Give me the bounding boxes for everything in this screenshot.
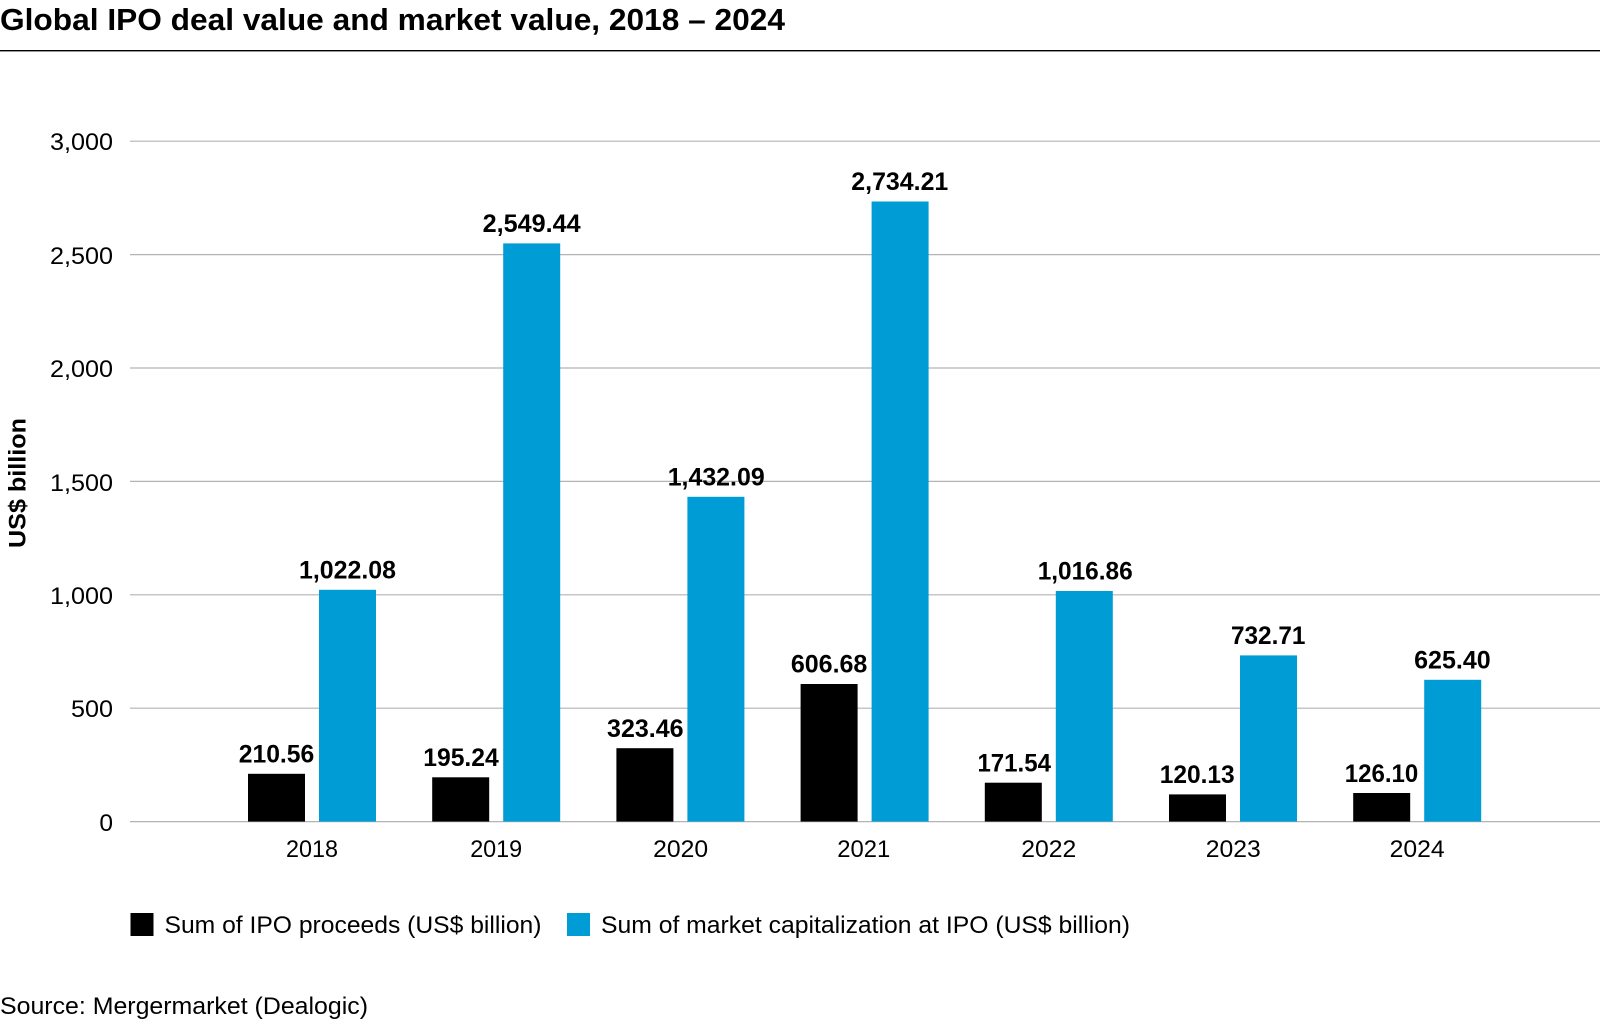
bars: 2022 [977,558,1133,863]
bars: 2018: 1,022.08 [299,556,396,584]
bars: 2020: 2020 [653,836,708,863]
y axis labels: 3,000 [50,129,113,156]
y axis labels: 1,000 [50,583,113,610]
y axis labels: 0 [99,810,113,837]
bars: 2024: 126.10 [1345,760,1418,788]
bars: 2020: 323.46 [607,715,684,743]
bars: 2018: 2018 [286,836,338,863]
bars: 2024: 2024 [1390,836,1445,863]
y axis labels: 2,500 [50,243,113,270]
bars: 2020: 1,432.09 [668,464,765,492]
y axis labels: 2,000 [50,356,113,383]
bars: 2019: 2,549.44 [483,210,581,238]
title: Global IPO deal value and market value, 2018 – 2024 [0,2,786,37]
bars: 2022: 171.54 [977,750,1051,778]
bars: 2019: 195.24 [423,744,499,772]
bars: 2023: 2023 [1206,836,1261,863]
bars: 2024: 625.40 [1414,646,1491,674]
source note: Source: Mergermarket (Dealogic) [0,993,368,1020]
bars: 2019 [423,210,581,863]
bars: 2021 [791,168,948,863]
bars: 2023: 732.71 [1231,622,1306,650]
y axis labels [50,129,113,837]
bars: 2020 [607,464,765,863]
y axis title: US$ billion [4,418,32,548]
bars: 2021: 2021 [837,836,890,863]
bars: 2022: 2022 [1021,836,1076,863]
legend: market capitalization: Sum of market capitalization at IPO (US$ billion) [601,912,1130,939]
bars: 2019: 2019 [470,836,522,863]
bars: 2022: 1,016.86 [1038,558,1133,586]
bars: 2024 [1345,646,1491,863]
legend [130,912,1130,939]
bars: 2021: 2,734.21 [851,168,948,196]
bars: 2023 [1160,622,1306,863]
bars: 2018 [239,556,396,863]
y axis labels: 1,500 [50,470,113,497]
legend: IPO proceeds: Sum of IPO proceeds (US$ billion) [164,912,542,939]
y axis labels: 500 [71,696,113,723]
bars: 2023: 120.13 [1160,761,1235,789]
bars: 2018: 210.56 [239,740,314,768]
bars: 2021: 606.68 [791,650,867,678]
